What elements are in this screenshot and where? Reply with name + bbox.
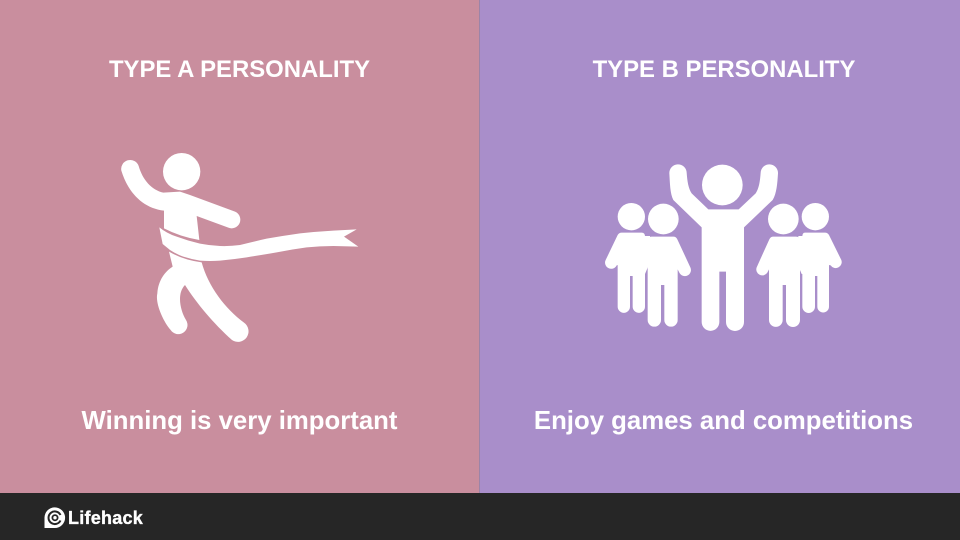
panel: type B bbox=[479, 0, 960, 493]
icon: group of people cheering bbox=[605, 164, 842, 331]
heading: type B: TYPE B PERSONALITY bbox=[593, 56, 855, 83]
heading: type A: TYPE A PERSONALITY bbox=[109, 56, 370, 83]
panel: type A bbox=[0, 0, 479, 493]
icon: Lifehack mark bbox=[44, 507, 66, 528]
footer bar bbox=[0, 493, 960, 540]
logo: Lifehack bbox=[44, 507, 143, 528]
icon: runner crossing finish line bbox=[121, 153, 358, 342]
caption: type A: Winning is very important bbox=[82, 407, 397, 435]
caption: type B: Enjoy games and competitions bbox=[534, 407, 913, 435]
wordmark: Lifehack bbox=[68, 508, 143, 528]
